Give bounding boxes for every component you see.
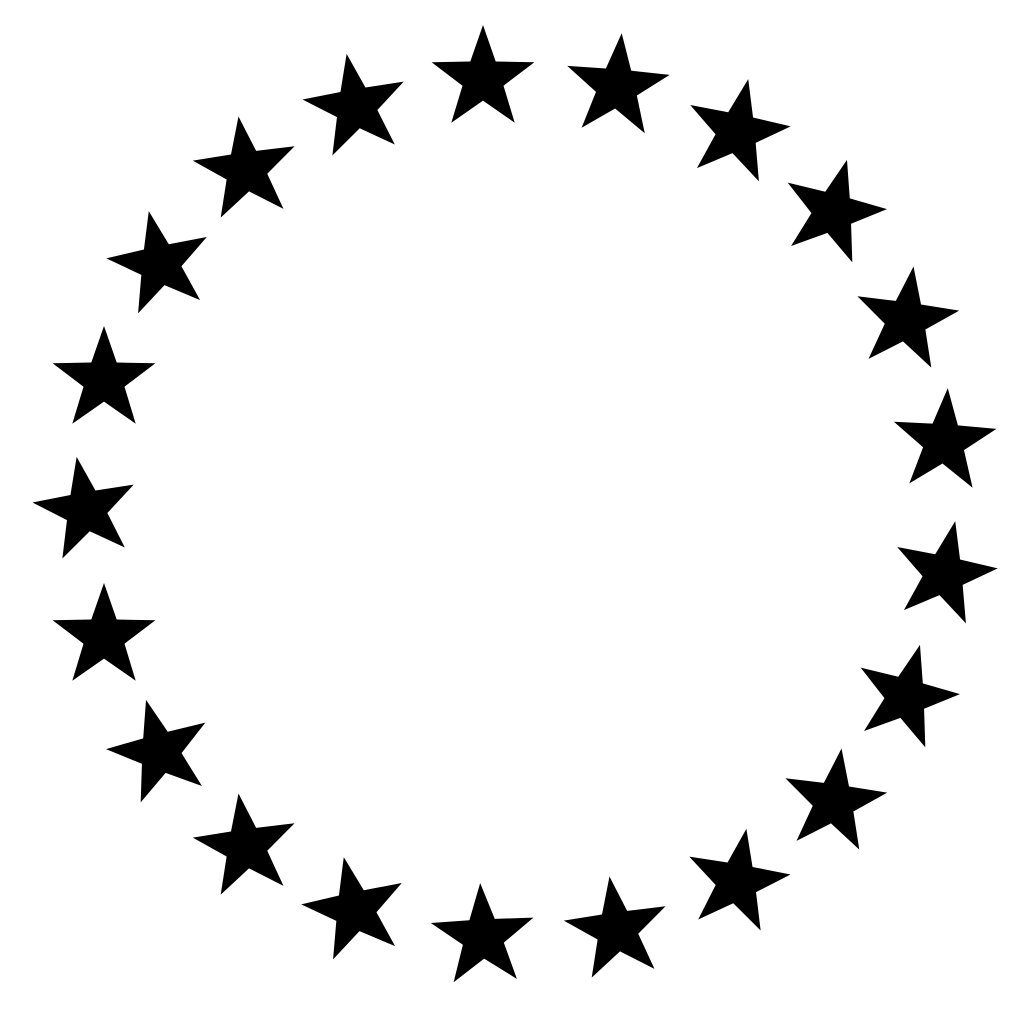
- star 13: [293, 846, 414, 963]
- star 18: [53, 326, 155, 424]
- star 17: [26, 448, 144, 562]
- star 15: [96, 687, 221, 808]
- star 1: [432, 25, 534, 123]
- star 5: [849, 259, 964, 370]
- star 6: [890, 385, 999, 489]
- star 7: [885, 510, 1006, 627]
- star 21: [296, 45, 414, 159]
- star 8: [845, 632, 970, 753]
- star 16: [53, 583, 155, 681]
- star 10: [679, 820, 797, 934]
- star 4: [772, 147, 897, 268]
- star 3: [678, 68, 799, 185]
- star 9: [777, 741, 892, 852]
- star 14: [188, 786, 303, 897]
- star 19: [98, 200, 219, 317]
- star 12: [429, 880, 537, 983]
- star 20: [188, 109, 303, 220]
- star 2: [562, 29, 673, 135]
- star 11: [559, 869, 674, 980]
